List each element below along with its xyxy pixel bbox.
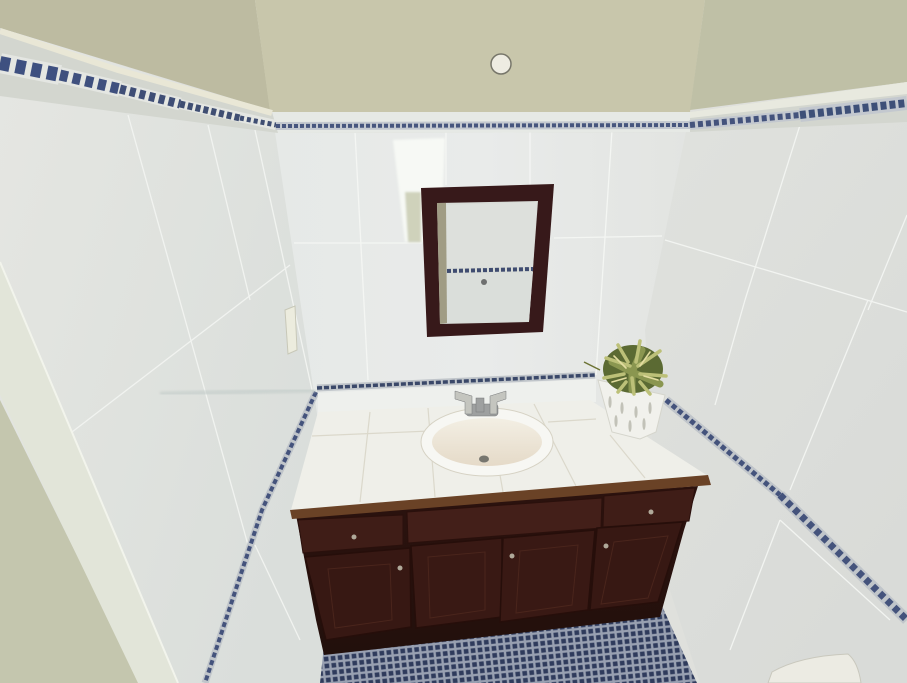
countertop	[291, 400, 708, 510]
vanity cabinet	[290, 475, 711, 655]
drawers	[298, 515, 403, 553]
sink	[421, 408, 553, 476]
white pot	[598, 380, 665, 439]
window reflection	[393, 138, 445, 242]
center tiled wall	[272, 112, 695, 420]
lower decorative borders	[160, 375, 907, 683]
upper walls	[0, 0, 907, 112]
toilet tank	[768, 654, 861, 683]
lower left wall and door frame	[0, 262, 178, 683]
plant	[584, 341, 666, 439]
left tiled wall	[0, 28, 330, 683]
light switch plate	[285, 306, 297, 354]
round ceiling fixture	[491, 54, 511, 74]
doors	[305, 548, 411, 640]
counter edge	[290, 475, 711, 519]
backsplash	[318, 379, 596, 416]
right tiled wall	[645, 85, 907, 683]
foliage	[603, 345, 663, 393]
floor	[320, 606, 697, 683]
faucet	[455, 391, 506, 416]
mirror	[421, 184, 554, 337]
upper decorative border	[0, 28, 907, 133]
door panels	[328, 536, 668, 628]
knobs	[352, 510, 654, 570]
